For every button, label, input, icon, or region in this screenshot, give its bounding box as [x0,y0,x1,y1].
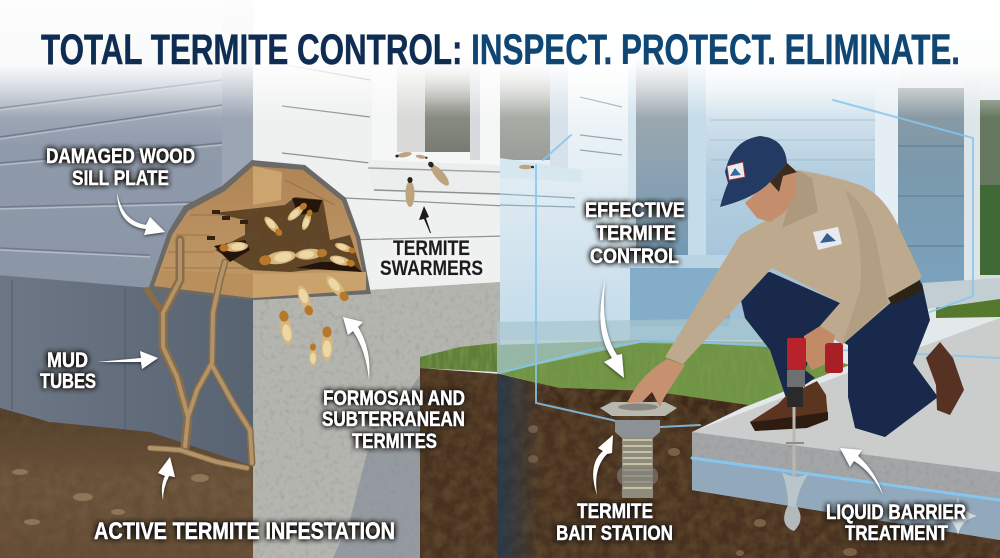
label: formosan and subterranean termites: SUBTERRANEAN [322,408,465,431]
arrow: active infestation [158,457,175,500]
shirt collar [782,170,818,228]
shirt shading [842,190,888,345]
khaki shirt [665,170,922,364]
label: mud tubes: MUD [47,349,88,372]
label: termite swarmers: TERMITE [393,237,470,260]
slab top surface [692,318,1000,472]
grey siding wall [0,0,222,295]
label: termite bait station: TERMITE [577,500,653,523]
soil stones [528,425,857,556]
gravel rocks [12,469,209,525]
label: effective termite control [585,199,685,268]
soil: right ground [420,368,1000,558]
termites inside the gallery [219,201,357,269]
technician [627,136,964,476]
foundation shadow [333,375,420,558]
liquid barrier blue lines [500,100,1000,500]
label: formosan and subterranean termites [322,387,465,453]
label: mud tubes: TUBES [40,370,96,393]
sparkle [942,497,977,535]
arrow: formosan termites [343,317,370,380]
label: damaged wood sill plate: SILL PLATE [72,167,169,190]
foundation: shaded left face [0,275,253,470]
arrow: effective control [600,280,624,378]
label: effective termite control: TERMITE [596,222,676,245]
concrete slab [692,318,1000,540]
blue tint on buried section [497,374,540,558]
lawn haze under glass [497,318,770,373]
label: effective termite control: CONTROL [590,245,679,268]
swarmers on window sill [395,151,534,207]
navy work pants [740,272,938,437]
rear boot [926,342,964,415]
label: active termite infestation: ACTIVE TERMITE INFESTATION [94,518,395,545]
gallery dark patches [214,198,362,272]
corner board [222,0,253,297]
label: termite swarmers [380,237,483,280]
head [745,166,797,222]
wood holes [207,212,248,238]
foundation: lit corner face [253,282,500,558]
treated house: blue walls [500,0,1000,340]
label: termite bait station [556,500,673,545]
label: damaged wood sill plate [46,145,195,190]
window [368,0,500,195]
soil: left ground [0,408,253,558]
lawn [497,340,850,407]
top white glow behind title [0,0,1000,118]
bait station side lugs [617,467,658,485]
liquid plume under slab [782,472,808,531]
broken siding rim [148,160,371,300]
cap [720,136,787,207]
lighter end grain block [253,166,282,205]
termites crawling on foundation [277,273,351,366]
label: liquid barrier treatment: LIQUID BARRIER [826,501,966,524]
front boot [750,381,828,431]
mud tubes [147,240,252,468]
arrow: mud tubes [97,351,158,369]
arrow: bait station [593,435,613,495]
bait station neck [615,420,660,438]
power drill [786,338,843,476]
slab treated band [692,458,1000,540]
bait station tube [622,432,653,498]
wood damage cutaway [148,160,371,300]
grass: left patch [420,343,497,372]
hair [770,163,797,192]
arrow: damaged wood [117,193,165,235]
arrow: swarmers [419,206,431,233]
label: liquid barrier treatment [826,501,966,545]
reaching hand [627,359,685,407]
wood grain lines [158,180,335,280]
label: effective termite control: EFFECTIVE [585,199,685,222]
label: formosan and subterranean termites: FORMOSAN AND [323,387,465,410]
shirt patch [813,227,842,250]
drill hand [804,326,835,370]
white siding wall [253,0,505,297]
label: formosan and subterranean termites: TERMITES [352,430,437,453]
belt [888,280,923,305]
slab front face [692,432,1000,540]
label: liquid barrier treatment: TREATMENT [845,522,948,545]
label: termite swarmers: SWARMERS [380,257,483,280]
arrow: liquid barrier [840,448,883,495]
label: mud tubes [40,349,96,393]
termite bait station [600,402,677,498]
termite gallery cavity [213,197,362,272]
exposed wood sill [154,166,366,298]
label: damaged wood sill plate: DAMAGED WOOD [46,145,195,168]
bait station cap [600,402,677,416]
label: termite bait station: BAIT STATION [556,522,673,545]
soil bed around bait station [533,384,748,425]
